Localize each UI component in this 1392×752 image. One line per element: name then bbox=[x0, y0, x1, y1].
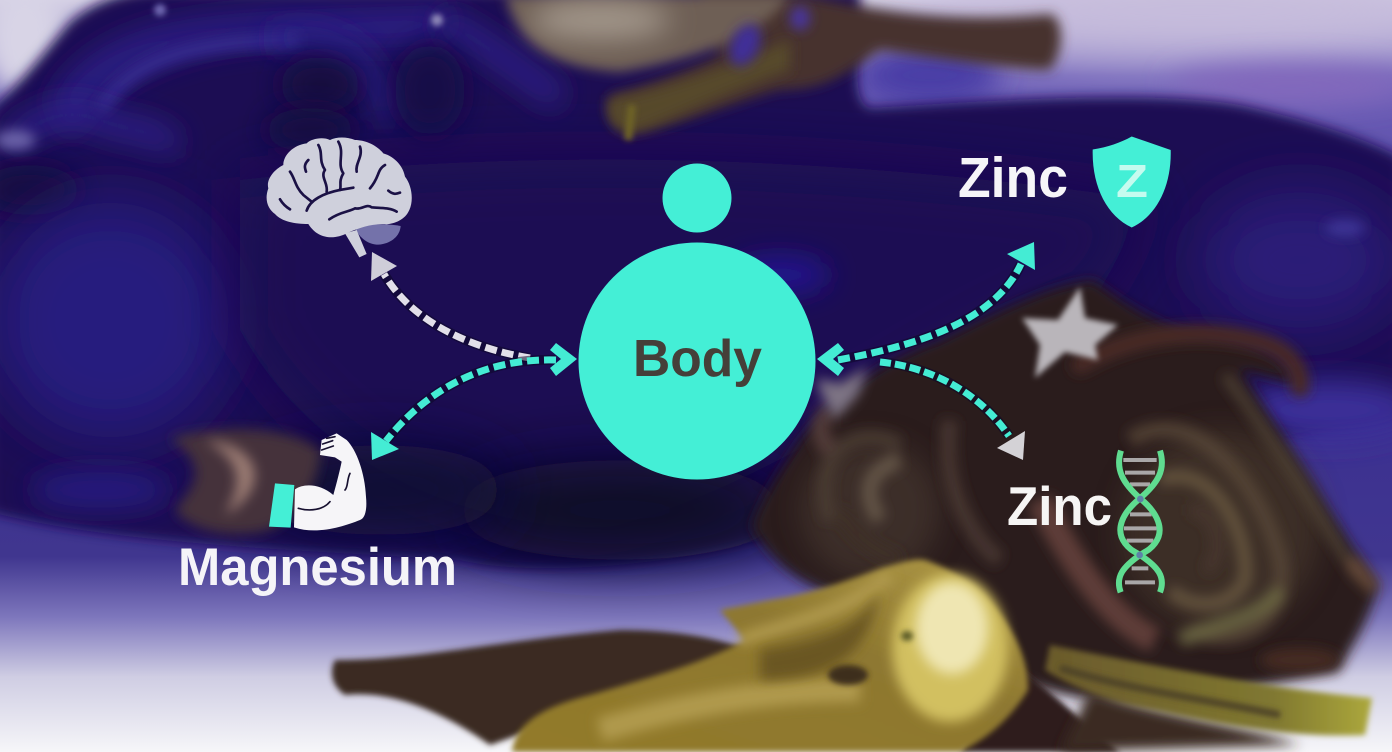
label: Magnesium: Magnesium bbox=[178, 538, 457, 597]
white stars bbox=[1022, 287, 1118, 378]
icon: DNA helix bbox=[1119, 451, 1162, 592]
arrowhead pointing at body, right bbox=[817, 343, 844, 376]
top root bbox=[609, 0, 1061, 133]
bottom dark root, lower right stalk and yellow root bbox=[332, 630, 760, 745]
label: Zinc, upper: Zinc bbox=[958, 146, 1068, 210]
icon: shield with Z bbox=[1093, 136, 1171, 228]
icon: brain bbox=[267, 137, 412, 257]
arrow: body to DNA, dashed teal bbox=[880, 362, 1025, 460]
upper left swirls bbox=[50, 5, 449, 140]
dark swirl body bbox=[0, 0, 1392, 568]
icon: shield with Z: Z bbox=[1116, 155, 1148, 207]
left brown fragment bbox=[170, 429, 320, 534]
icon: flexed arm with teal cuff bbox=[269, 433, 366, 530]
arrow: body to shield, dashed teal bbox=[838, 242, 1035, 360]
arrow: body to brain, dashed grey bbox=[371, 252, 530, 358]
right brown mass bbox=[752, 280, 1378, 700]
arrow: body to magnesium, dashed teal bbox=[371, 360, 556, 460]
arrowhead pointing at body, left bbox=[550, 343, 577, 376]
label: Body: Body bbox=[633, 330, 762, 388]
mid left blue haze and central darks bbox=[0, 200, 230, 440]
label: Zinc, lower: Zinc bbox=[1007, 475, 1112, 537]
small top circle bbox=[662, 164, 732, 232]
main body circle bbox=[578, 242, 816, 480]
